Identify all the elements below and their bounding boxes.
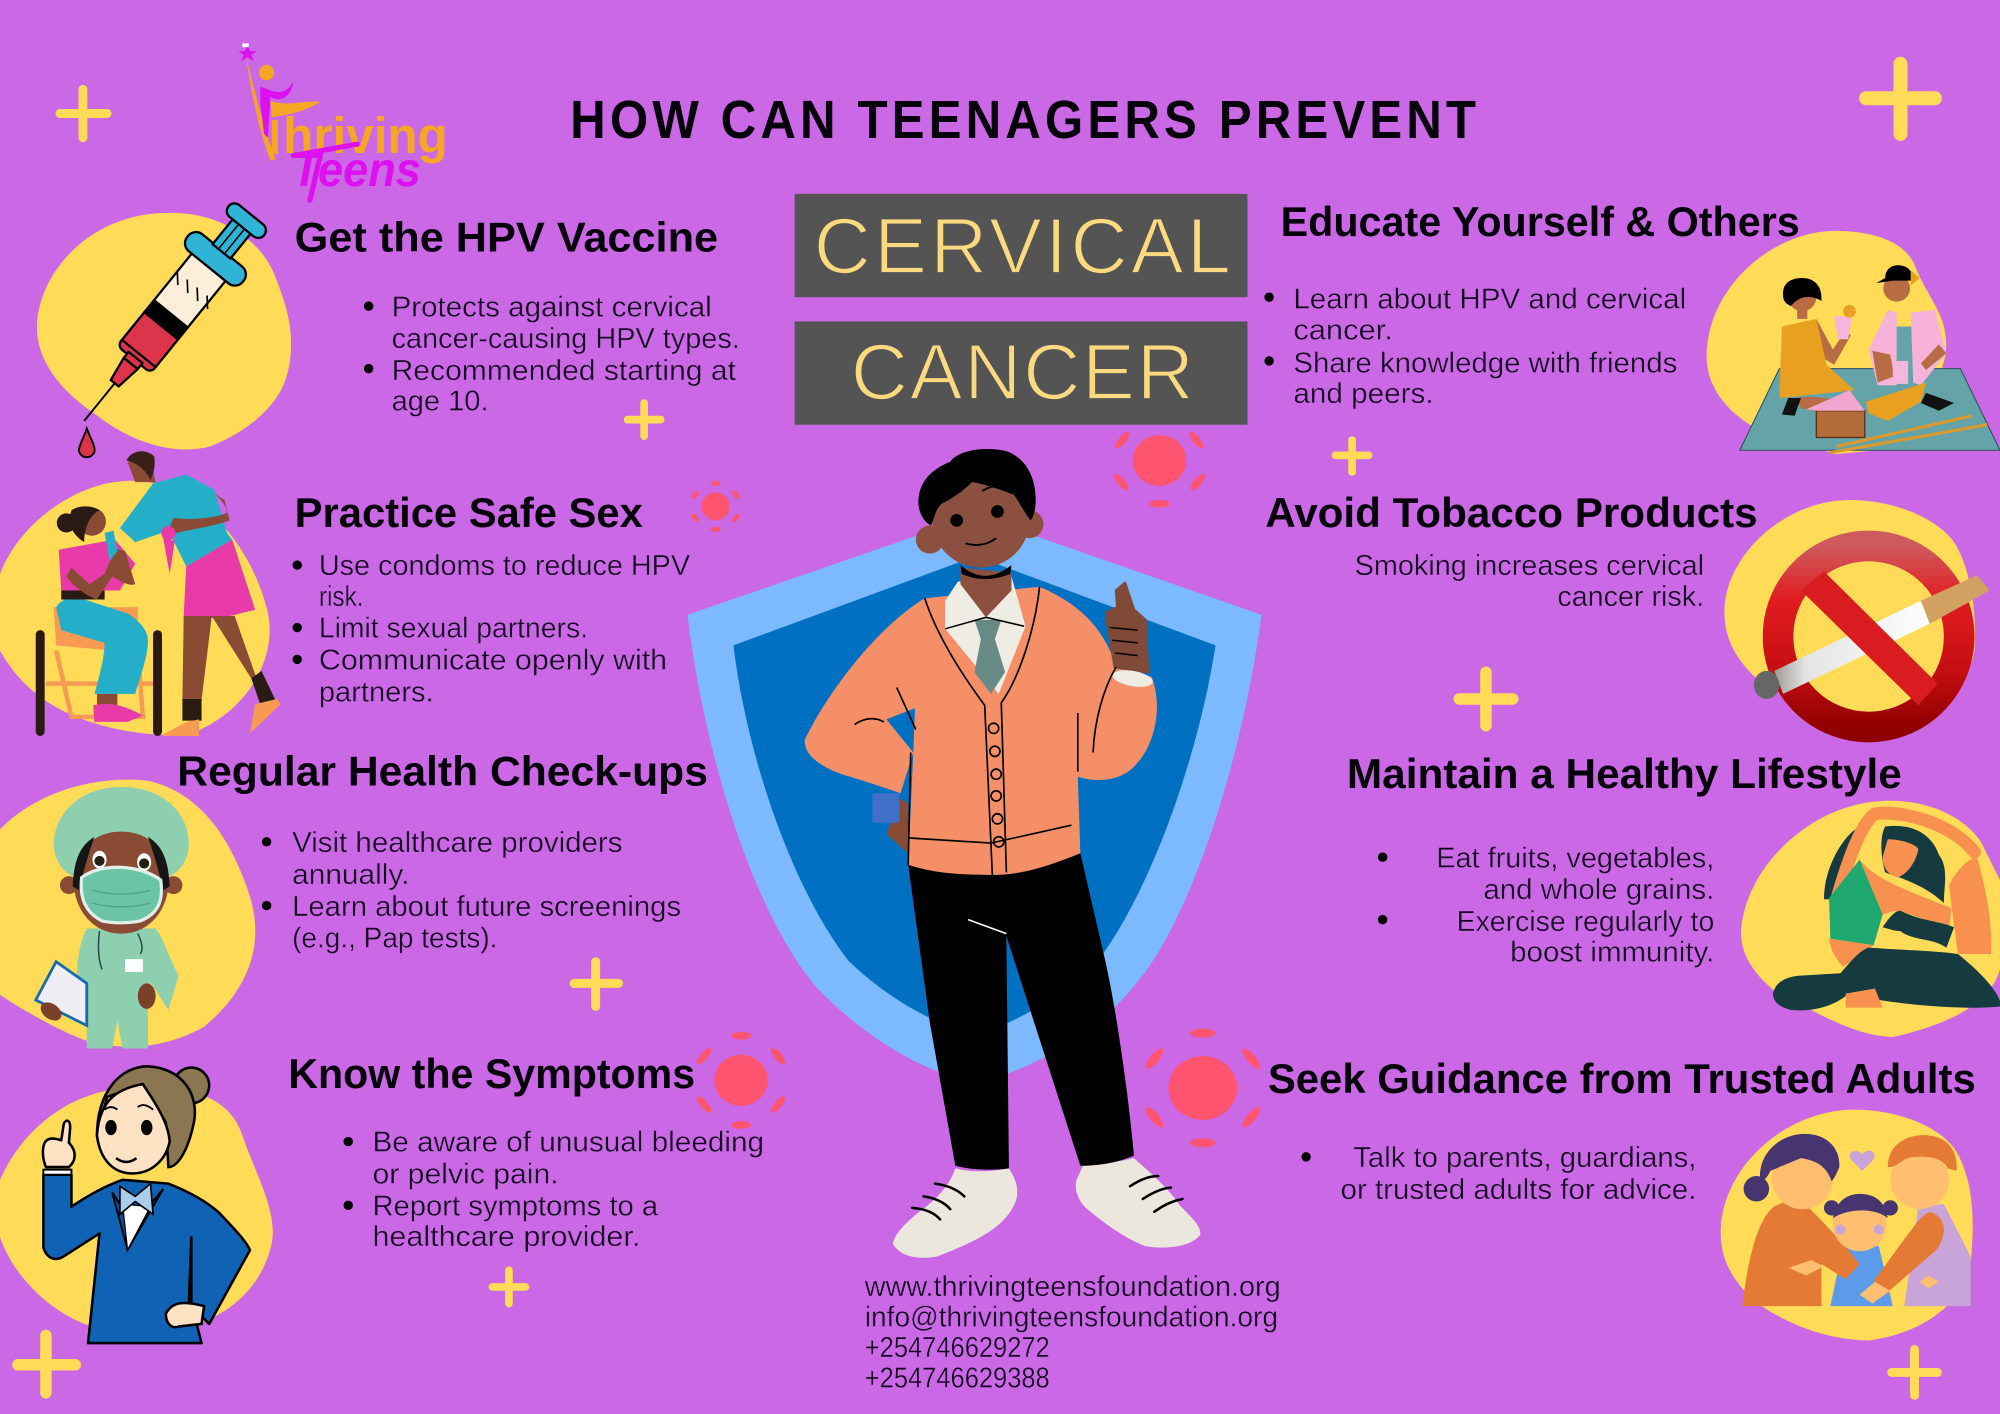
panel: educate yourself and others	[1264, 198, 2000, 454]
text block	[1355, 550, 1704, 613]
bullet list: age 10.	[392, 386, 489, 418]
bullet list: Share knowledge with friends	[1293, 347, 1677, 379]
bullet list: Protects against cervical	[392, 291, 712, 323]
bullet list: healthcare provider.	[372, 1221, 640, 1253]
bullet list: and whole grains.	[1483, 874, 1714, 906]
heading: Get the HPV Vaccine	[295, 213, 718, 260]
contact details: +254746629272	[865, 1332, 1050, 1364]
logo: Thriving Teens: hriving	[283, 107, 448, 164]
bullet list	[292, 550, 691, 709]
bullet list: Recommended starting at	[392, 355, 736, 387]
banner: cancer: CANCER	[851, 327, 1194, 416]
panel: seek guidance from trusted adults	[1268, 1055, 1976, 1341]
panel: avoid tobacco products	[1265, 489, 1990, 727]
icon: syringe on yellow blob	[37, 192, 291, 457]
panel: get the HPV vaccine	[37, 192, 740, 457]
heading: Seek Guidance from Trusted Adults	[1268, 1055, 1976, 1102]
pink sun: symptoms	[695, 1032, 788, 1129]
bullet list: or pelvic pain.	[372, 1159, 559, 1191]
bullet list: cancer.	[1293, 314, 1393, 346]
banner: cancer	[795, 321, 1247, 425]
heading: Regular Health Check-ups	[177, 748, 708, 795]
logo: Thriving Teens	[239, 43, 448, 200]
bullet list: risk.	[319, 581, 364, 613]
bullet list: or trusted adults for advice.	[1341, 1174, 1696, 1206]
bullet list	[364, 291, 740, 418]
bullet list: Eat fruits, vegetables,	[1436, 842, 1714, 874]
bullet list: Learn about HPV and cervical	[1293, 284, 1686, 316]
icon: friends on picnic mat on yellow blob	[1707, 231, 2000, 454]
icon: no smoking sign on yellow blob	[1724, 500, 1990, 727]
text block: Smoking increases cervical	[1355, 550, 1704, 582]
panel: know the symptoms	[0, 1050, 764, 1343]
central figure: boy in front of shield	[688, 449, 1261, 1258]
heading: Know the Symptoms	[288, 1050, 695, 1097]
bullet list: Communicate openly with	[319, 645, 667, 677]
logo: Thriving Teens: Teens	[292, 143, 421, 197]
text block: cancer risk.	[1557, 581, 1704, 613]
contact details: info@thrivingteensfoundation.org	[865, 1302, 1278, 1334]
bullet list: Use condoms to reduce HPV	[319, 550, 691, 582]
pink sun: top right of centre	[1112, 430, 1207, 508]
bullet list: Visit healthcare providers	[292, 827, 622, 859]
bullet list	[262, 827, 681, 955]
bullet list: (e.g., Pap tests).	[292, 923, 497, 955]
bullet list: Be aware of unusual bleeding	[372, 1127, 764, 1159]
contact details: +254746629388	[865, 1363, 1050, 1395]
icon: nurse on yellow blob	[0, 780, 255, 1048]
bullet list: cancer-causing HPV types.	[392, 323, 740, 355]
panel: maintain a healthy lifestyle	[1347, 750, 2000, 1037]
icon: yoga pose on yellow blob	[1741, 801, 2000, 1037]
boy	[805, 449, 1200, 1258]
bullet list	[1378, 842, 1714, 969]
icon: couple with wheelchair on yellow blob	[0, 451, 281, 736]
icon: woman in blue blazer on yellow blob	[0, 1066, 273, 1343]
pink sun: guidance	[1143, 1029, 1263, 1147]
contact details: www.thrivingteensfoundation.org	[864, 1271, 1281, 1303]
heading: Educate Yourself & Others	[1281, 198, 1800, 245]
heading: Practice Safe Sex	[295, 489, 643, 536]
icon: shield	[688, 515, 1261, 1084]
heading: Avoid Tobacco Products	[1265, 489, 1758, 536]
bullet list: Report symptoms to a	[372, 1191, 658, 1223]
panel: practice safe sex	[0, 451, 691, 736]
bullet list: Limit sexual partners.	[319, 613, 588, 645]
bullet list: Talk to parents, guardians,	[1353, 1142, 1696, 1174]
contact details	[864, 1271, 1281, 1395]
bullet list	[1301, 1142, 1696, 1206]
icon: family hugging on yellow blob	[1721, 1110, 1973, 1341]
bullet list: Exercise regularly to	[1457, 906, 1714, 938]
bullet list	[344, 1127, 764, 1253]
pink sun: safe sex	[690, 481, 741, 532]
bullet list: and peers.	[1293, 378, 1434, 410]
panel: regular health check-ups	[0, 748, 708, 1048]
banner: cervical: CERVICAL	[814, 201, 1231, 290]
bullet list: boost immunity.	[1510, 937, 1714, 969]
bullet list: annually.	[292, 859, 409, 891]
bullet list: Learn about future screenings	[292, 891, 681, 923]
bullet list: partners.	[319, 677, 434, 709]
title: HOW CAN TEENAGERS PREVENT	[570, 89, 1476, 149]
heading: Maintain a Healthy Lifestyle	[1347, 750, 1902, 797]
bullet list	[1264, 284, 1686, 410]
